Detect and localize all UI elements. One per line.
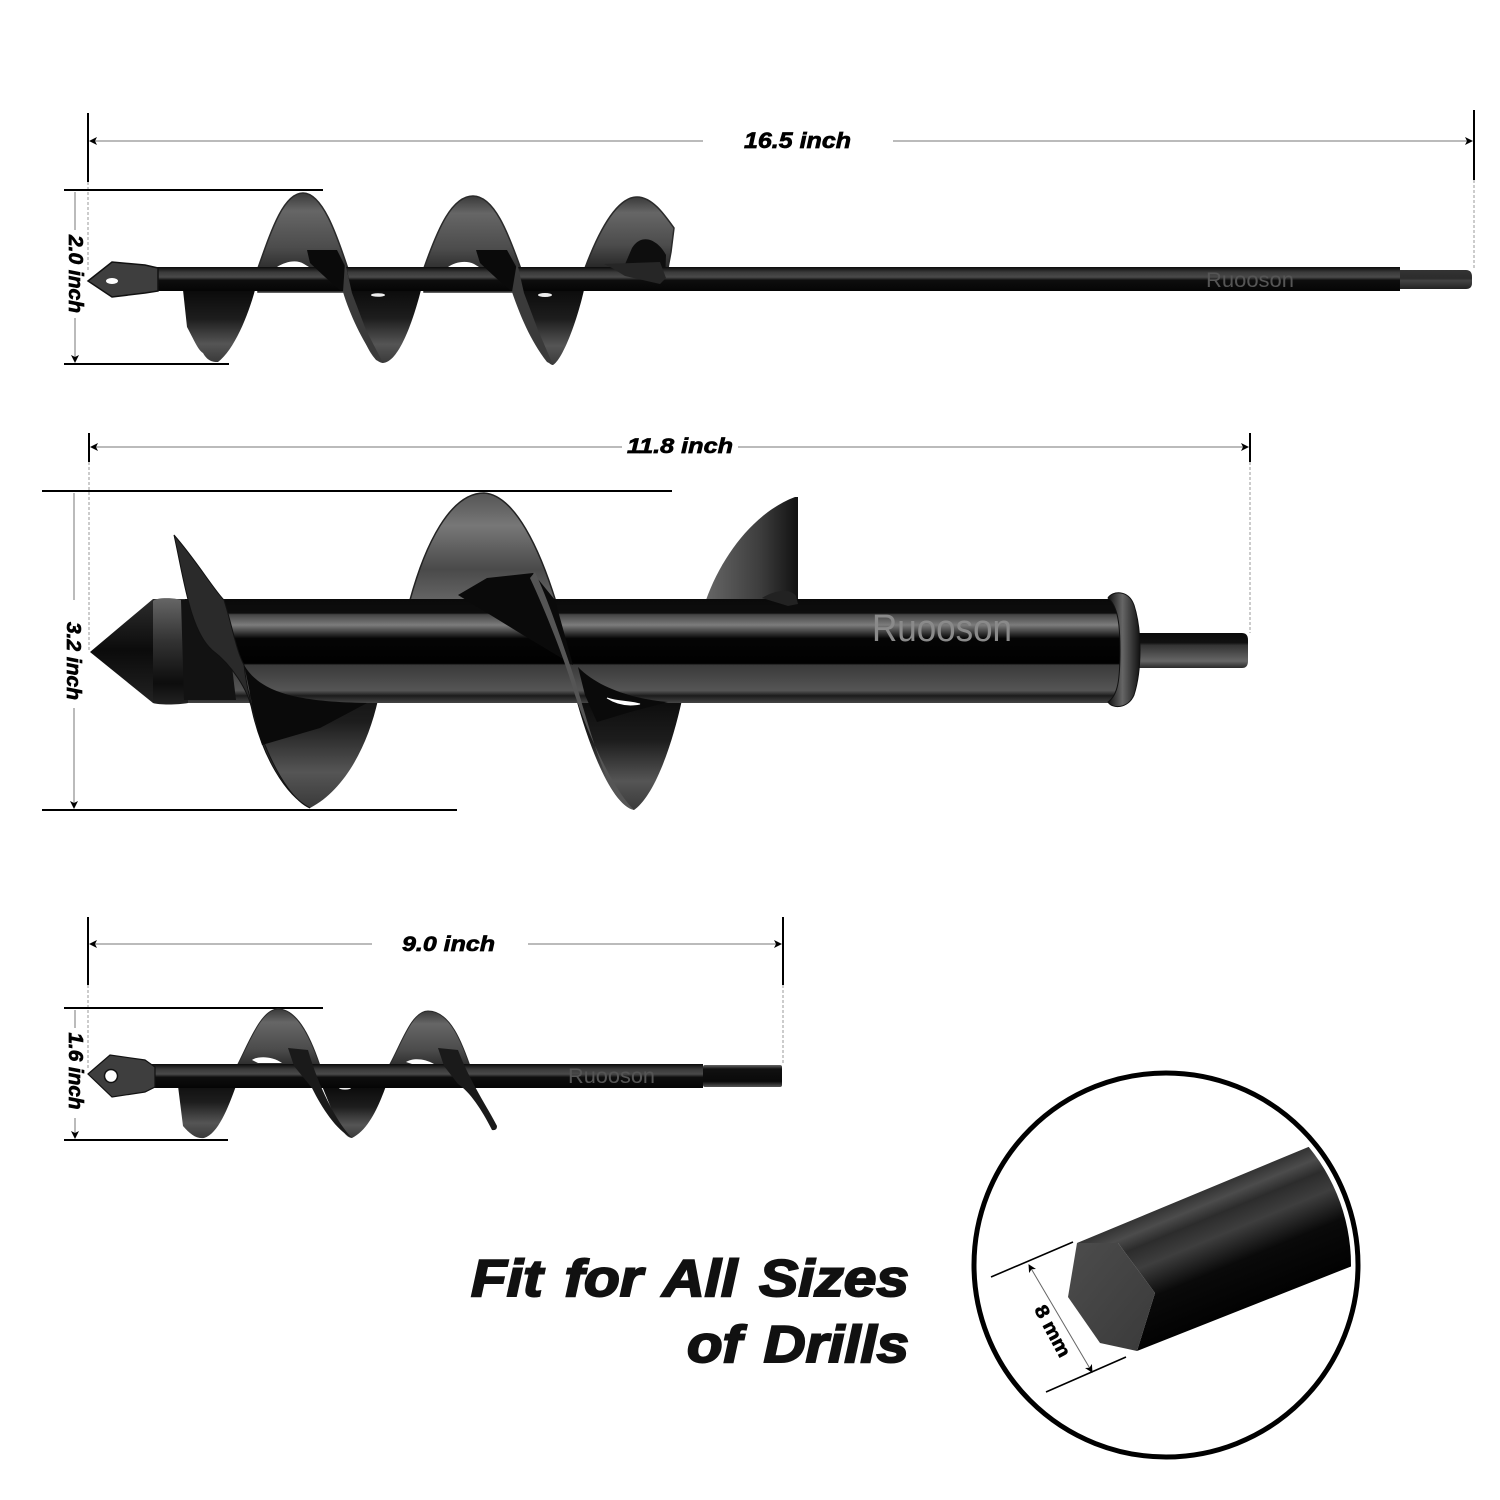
shaft, long bit bbox=[156, 267, 1400, 291]
front blade crossings, long bit bbox=[307, 250, 666, 365]
dimension: 3.2 inch diameter bbox=[42, 491, 672, 810]
hex shank, long bit bbox=[1400, 270, 1472, 289]
dimension: 9.0 inch length bbox=[88, 917, 783, 1070]
conical tip, wide bit bbox=[90, 598, 236, 704]
dimension: 11.8 inch length: 11.8 inch bbox=[627, 435, 733, 458]
dimension: 3.2 inch diameter: 3.2 inch bbox=[62, 622, 84, 700]
dimension: 2.0 inch diameter bbox=[64, 190, 323, 364]
hex shank body bbox=[1077, 1146, 1351, 1351]
dimension: 11.8 inch length bbox=[89, 433, 1250, 650]
rear helical blades, long bit bbox=[183, 193, 674, 365]
spade tip, long bit bbox=[88, 262, 158, 297]
hex shank, short bit bbox=[703, 1065, 782, 1087]
dimension: 9.0 inch length: 9.0 inch bbox=[402, 933, 495, 956]
front blade crossings, wide bit bbox=[174, 535, 798, 810]
brand: Ruooson, long bit: Ruooson bbox=[1206, 269, 1294, 292]
dimension: 2.0 inch diameter: 2.0 inch bbox=[64, 234, 86, 313]
front blade crossings, short bit bbox=[288, 1048, 497, 1138]
shaft, short bit bbox=[150, 1064, 703, 1088]
dimension: 16.5 inch length bbox=[88, 110, 1474, 270]
barrel shaft, wide bit bbox=[180, 599, 1122, 703]
hex shank end face bbox=[1068, 1243, 1155, 1351]
spade tip, short bit bbox=[88, 1055, 155, 1097]
dimension: 8 mm bbox=[991, 1242, 1126, 1392]
auger bit: short 9.0 inch bbox=[88, 1009, 782, 1138]
hex shank, wide bit bbox=[1136, 633, 1248, 668]
rear helical blades, short bit bbox=[177, 1009, 472, 1138]
collar flange, wide bit bbox=[1108, 593, 1140, 707]
heading: Fit for All Sizes of Drills: of Drills bbox=[687, 1316, 909, 1374]
brand: Ruooson, wide bit: Ruooson bbox=[872, 608, 1012, 650]
heading: Fit for All Sizes of Drills bbox=[471, 1250, 909, 1374]
heading: Fit for All Sizes of Drills: Fit for All Sizes bbox=[471, 1250, 909, 1308]
rear helical blades, wide bit bbox=[244, 493, 798, 810]
dimension: 1.6 inch diameter bbox=[64, 1008, 323, 1140]
brand: Ruooson, short bit: Ruooson bbox=[568, 1065, 655, 1088]
dimension: 8 mm: 8 mm bbox=[1029, 1302, 1074, 1361]
dimension: 16.5 inch length: 16.5 inch bbox=[744, 128, 851, 153]
dimension: 1.6 inch diameter: 1.6 inch bbox=[64, 1032, 86, 1110]
auger bit: long 16.5 inch bbox=[88, 193, 1472, 365]
callout: hex shank close-up circle bbox=[974, 1073, 1380, 1457]
auger bit: wide 11.8 inch bbox=[90, 493, 1248, 810]
